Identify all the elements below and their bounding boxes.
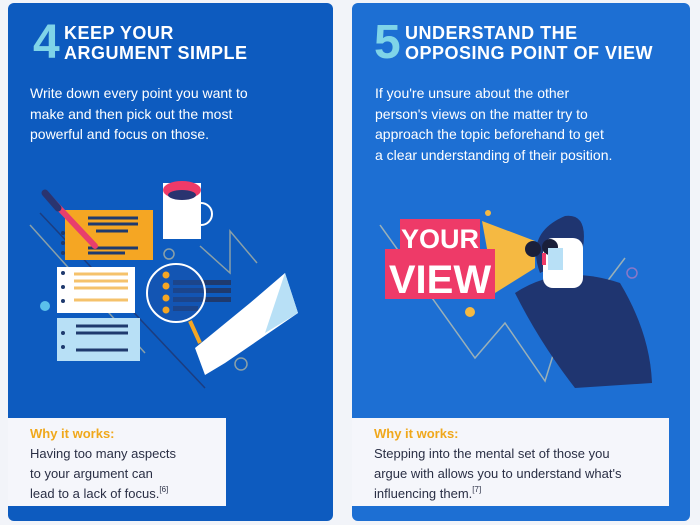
panel: keep argument simple (8, 3, 333, 521)
text block 5: approach the topic beforehand to get (375, 126, 604, 142)
panel: understand opposing view (352, 3, 690, 521)
heading 5: OPPOSING POINT OF VIEW (405, 43, 653, 63)
text block 5 (375, 85, 612, 163)
heading 5 (405, 23, 653, 63)
illustration: your view binoculars (380, 210, 652, 388)
heading 4: KEEP YOUR (64, 23, 174, 43)
callout: why it works 5: influencing them.[7] (374, 485, 481, 501)
callout: why it works 5 (352, 418, 669, 506)
callout: why it works 4: Why it works: (30, 426, 115, 441)
illustration: your view binoculars: VIEW (389, 258, 491, 302)
callout: why it works 4: Having too many aspects (30, 446, 176, 461)
callout: why it works 5: Why it works: (374, 426, 459, 441)
callout: why it works 4: to your argument can (30, 466, 153, 481)
text block 5: If you're unsure about the other (375, 85, 569, 101)
callout: why it works 5: Stepping into the mental set of those you (374, 446, 610, 461)
text block 4: powerful and focus on those. (30, 126, 209, 142)
number 4: 4 (33, 16, 60, 69)
number 5: 5 (374, 16, 401, 69)
illustration: notes and magnifier (30, 181, 298, 388)
text block 4 (30, 85, 248, 142)
heading 4: ARGUMENT SIMPLE (64, 43, 248, 63)
illustration: your view binoculars: YOUR (401, 224, 479, 254)
text block 5: a clear understanding of their position. (375, 146, 612, 162)
callout: why it works 5: argue with allows you to understand what's (374, 466, 621, 481)
heading 5: UNDERSTAND THE (405, 23, 578, 43)
callout: why it works 4: lead to a lack of focus.[6] (30, 485, 168, 501)
text block 4: Write down every point you want to (30, 85, 248, 101)
text block 4: make and then pick out the most (30, 106, 232, 122)
text block 5: person's views on the matter try to (375, 106, 588, 122)
callout: why it works 4 (8, 418, 226, 506)
heading 4 (64, 23, 248, 63)
